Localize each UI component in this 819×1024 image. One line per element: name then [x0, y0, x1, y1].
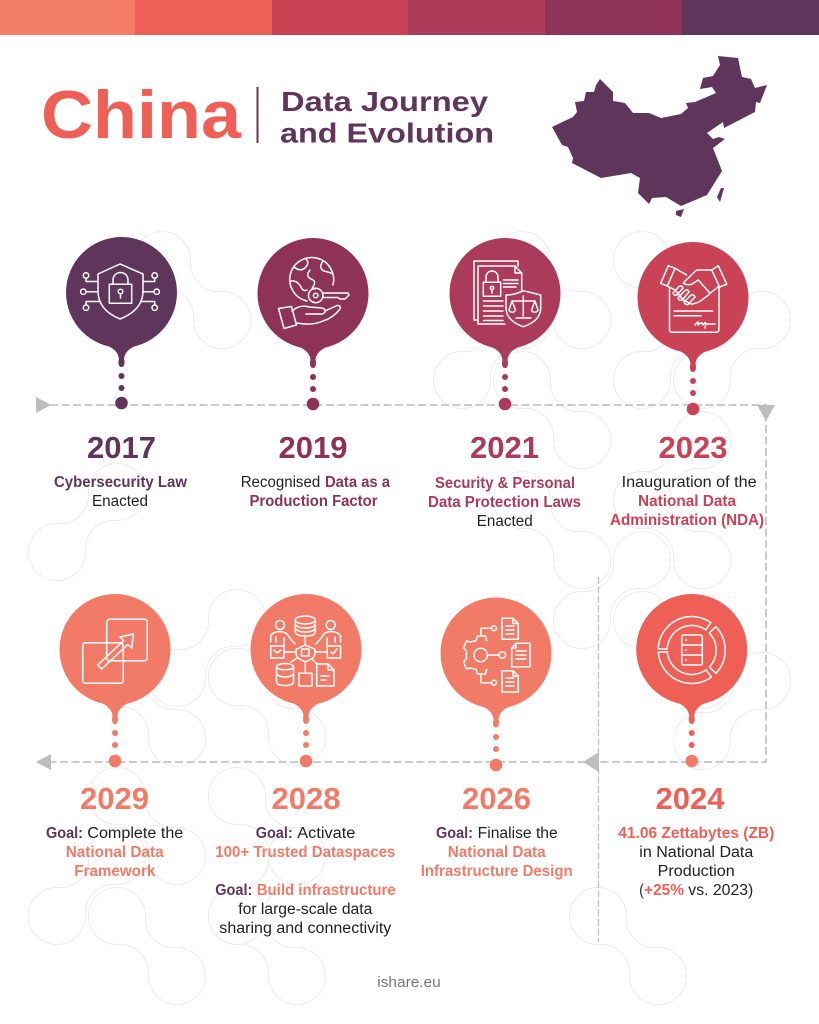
icon: server ring	[658, 617, 725, 683]
milestone 2029	[46, 594, 183, 880]
title	[41, 77, 494, 153]
milestone 2021	[428, 238, 581, 530]
text 2029: Complete the	[87, 825, 183, 842]
year 2023: 2023	[658, 430, 728, 465]
text 2029: Framework	[74, 863, 156, 880]
text 2021: Security & Personal	[435, 475, 575, 492]
text 2024: +25%	[644, 882, 684, 899]
marker 2023	[638, 242, 748, 415]
text 2023: National Data	[638, 493, 736, 510]
year 2026: 2026	[462, 781, 531, 816]
milestone 2024	[618, 594, 774, 899]
text 2021: Data Protection Laws	[428, 494, 581, 511]
icon: documents lock scales shield	[474, 261, 541, 327]
text 2028: for large-scale data	[238, 901, 373, 918]
text 2028: Build infrastructure	[257, 882, 396, 899]
footer source: ishare.eu	[377, 974, 441, 991]
title: China	[41, 77, 242, 153]
marker 2029	[60, 594, 170, 767]
text 2029: National Data	[66, 844, 164, 861]
icon: globe key hand	[278, 258, 349, 328]
icon: handshake contract	[661, 266, 727, 332]
text 2019: Data as a	[325, 474, 390, 491]
icon: data governance network	[271, 616, 341, 686]
text 2024	[618, 825, 774, 899]
text 2017: Enacted	[92, 493, 148, 510]
icon: shield lock circuit	[81, 264, 159, 319]
year 2017: 2017	[87, 430, 156, 465]
text 2017: Cybersecurity Law	[54, 474, 188, 491]
top colour band	[0, 0, 819, 35]
title: Data Journey	[281, 86, 488, 117]
marker 2026	[440, 598, 552, 771]
text 2019: Recognised	[241, 474, 320, 491]
year 2029: 2029	[80, 781, 149, 816]
year 2024: 2024	[656, 781, 725, 816]
text 2024: vs. 2023)	[688, 882, 753, 899]
text 2023: Administration (NDA)	[610, 512, 764, 529]
milestone 2017	[54, 237, 188, 510]
text 2028: Activate	[297, 825, 355, 842]
text 2026: Infrastructure Design	[421, 863, 573, 880]
marker 2019	[258, 238, 368, 410]
text 2017	[54, 474, 188, 510]
icon: gear documents	[464, 618, 530, 692]
text 2028: 100+ Trusted Dataspaces	[215, 844, 395, 861]
marker 2028	[250, 594, 362, 767]
marker 2017	[66, 237, 177, 409]
text 2023: Inauguration of the	[622, 474, 757, 491]
text 2024: 41.06 Zettabytes (ZB)	[618, 825, 774, 842]
milestone 2026	[421, 598, 573, 880]
text 2023	[610, 474, 764, 529]
title: and Evolution	[280, 118, 494, 148]
text 2019	[241, 474, 390, 510]
text 2021	[428, 475, 581, 530]
text 2026: National Data	[448, 844, 546, 861]
milestone 2019	[241, 238, 390, 510]
text 2026: Finalise the	[478, 825, 558, 842]
icon: overlapping squares arrow	[83, 619, 147, 683]
text 2029	[46, 825, 183, 880]
year 2021: 2021	[470, 430, 539, 465]
text 2019: Production Factor	[250, 493, 378, 510]
text 2028	[215, 825, 396, 937]
map of China	[552, 56, 767, 217]
milestone 2023	[610, 242, 764, 529]
text 2026	[421, 825, 573, 880]
text 2026: Goal:	[436, 825, 473, 842]
year 2019: 2019	[278, 430, 348, 465]
marker 2021	[450, 238, 560, 410]
text 2024: in National Data	[639, 844, 754, 861]
text 2028: Goal:	[215, 882, 252, 899]
text 2024: (	[639, 882, 645, 899]
text 2028: Goal:	[256, 825, 293, 842]
text 2024: Production	[658, 863, 735, 880]
milestone 2028	[215, 594, 396, 937]
year 2028: 2028	[272, 781, 340, 816]
text 2028: sharing and connectivity	[219, 920, 392, 937]
marker 2024	[636, 594, 747, 767]
text 2029: Goal:	[46, 825, 83, 842]
timeline path	[36, 397, 775, 942]
text 2021: Enacted	[477, 513, 533, 530]
